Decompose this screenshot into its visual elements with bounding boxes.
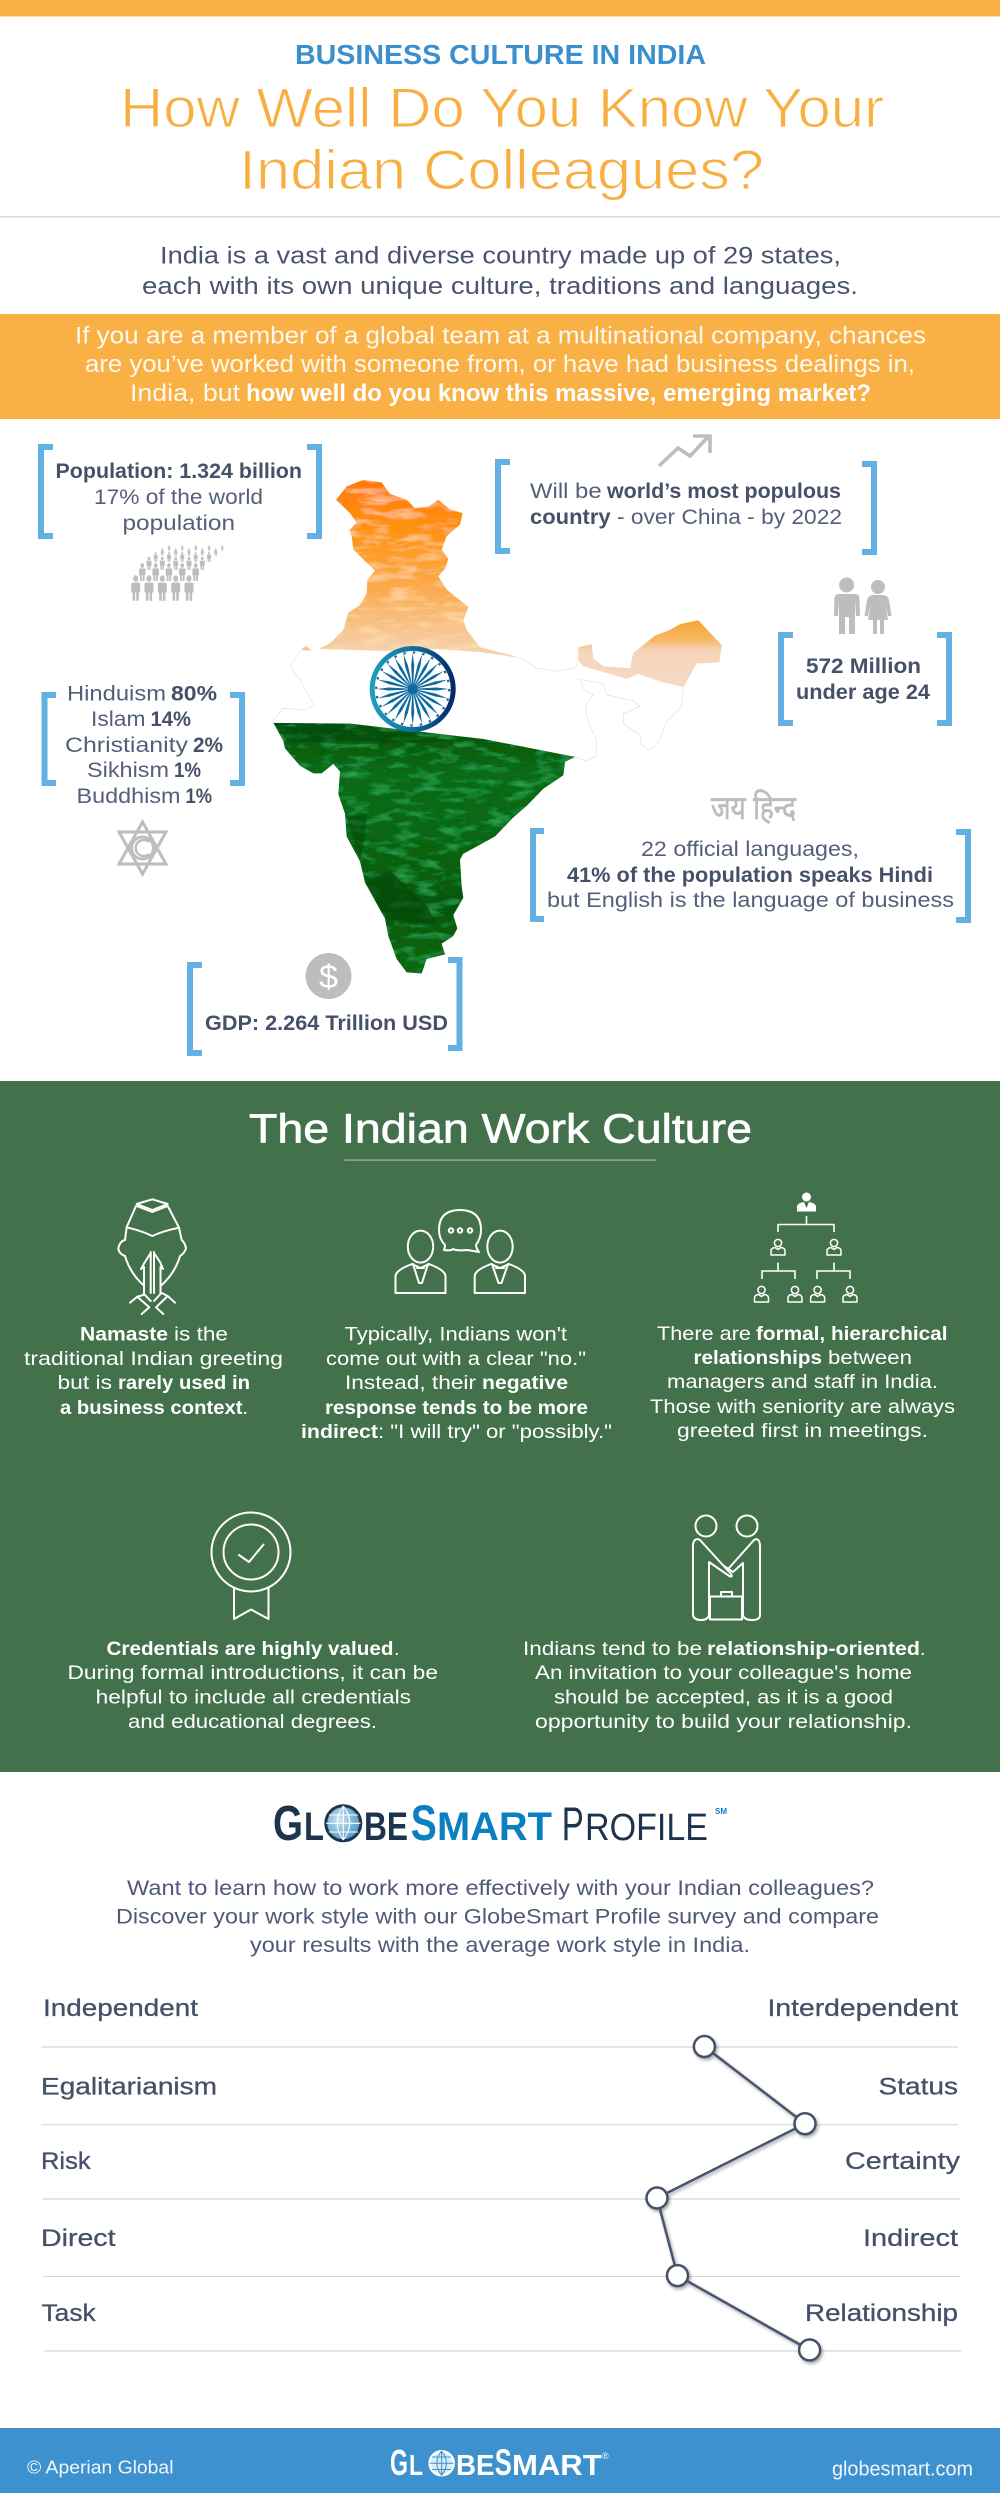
panel: most populous: country bbox=[530, 506, 611, 529]
panel: religions: Buddhism bbox=[76, 785, 180, 808]
icon: hierarchy bbox=[754, 1192, 857, 1302]
map: saffron region bbox=[318, 480, 522, 659]
panel: population: population bbox=[122, 512, 235, 535]
logo: globesmart profile: P bbox=[562, 1797, 584, 1850]
map of India in flag colours bbox=[272, 480, 722, 974]
intro text: each with its own unique culture, traditions and languages. bbox=[142, 273, 858, 300]
scale labels bbox=[41, 1995, 960, 2327]
text: indirect response bbox=[301, 1324, 612, 1443]
footer: globesmart.com bbox=[832, 2459, 973, 2481]
text: relationship oriented: relationship-oriented bbox=[707, 1638, 920, 1660]
scale labels: Interdependent bbox=[768, 1995, 958, 2022]
title bbox=[120, 76, 884, 201]
logo: globesmart profile: MART bbox=[437, 1805, 552, 1849]
panel: languages: but English is the language of business bbox=[547, 889, 954, 912]
text: hierarchy: Those with seniority are always bbox=[650, 1396, 955, 1418]
panel: religions: 80% bbox=[171, 682, 217, 706]
text: profile invitation: Want to learn how to work more effectively with your Indian colleagues? bbox=[127, 1876, 874, 1900]
profile line with nodes bbox=[646, 2036, 820, 2360]
panel: languages bbox=[533, 789, 968, 920]
logo: globesmart profile: BE bbox=[364, 1805, 408, 1849]
footer: © Aperian Global bbox=[27, 2457, 174, 2477]
logo: globesmart profile: G bbox=[273, 1797, 303, 1851]
text: namaste: traditional Indian greeting bbox=[24, 1348, 283, 1370]
scale labels: Status bbox=[878, 2074, 958, 2101]
intro text: India is a vast and diverse country made up of 29 states, bbox=[160, 242, 841, 270]
footer bbox=[0, 2428, 1000, 2493]
icon: handshake bbox=[693, 1516, 760, 1620]
panel: population: Population: 1.324 billion bbox=[56, 460, 302, 483]
icon: religious star and crescent bbox=[119, 822, 166, 874]
orange callout band: are you’ve worked with someone from, or have had business dealings in, bbox=[85, 351, 915, 378]
text: profile invitation: Discover your work style with our GlobeSmart Profile survey and compare bbox=[116, 1905, 879, 1929]
text: relationship oriented: . bbox=[920, 1638, 925, 1660]
text: relationship oriented bbox=[523, 1638, 925, 1733]
panel: religions: Islam bbox=[91, 708, 146, 731]
orange callout band: how well do you know this massive, emerging market? bbox=[246, 380, 871, 407]
text: relationship oriented: opportunity to build your relationship. bbox=[535, 1711, 912, 1733]
logo: globesmart: MART bbox=[512, 2450, 602, 2482]
scale labels: Risk bbox=[41, 2148, 92, 2175]
title: How Well Do You Know Your bbox=[120, 76, 884, 139]
orange callout band: If you are a member of a global team at a multinational company, chances bbox=[75, 322, 926, 350]
icon: dollar coin bbox=[306, 953, 352, 999]
text: namaste: . bbox=[242, 1397, 248, 1419]
scale labels: Indirect bbox=[863, 2225, 958, 2252]
panel: religions: Sikhism bbox=[87, 759, 169, 782]
chart: work style scales bbox=[41, 1995, 961, 2360]
heading: business culture in india: BUSINESS CULTURE IN INDIA bbox=[295, 39, 706, 70]
icon: dollar coin: $ bbox=[319, 958, 338, 995]
text: indirect response: negative bbox=[482, 1372, 568, 1394]
scale labels: Egalitarianism bbox=[41, 2074, 217, 2101]
scale labels: Independent bbox=[43, 1995, 198, 2022]
map: white band outline bbox=[272, 649, 683, 761]
text: namaste bbox=[24, 1324, 283, 1419]
intro text bbox=[142, 242, 858, 300]
scale labels: Task bbox=[42, 2300, 97, 2327]
panel: GDP bbox=[190, 953, 460, 1053]
panel: religions: 1% bbox=[186, 785, 212, 808]
text: hierarchy: There are bbox=[657, 1323, 751, 1345]
panel: 572 million under 24 bbox=[781, 578, 949, 723]
text: hierarchy: relationships bbox=[694, 1347, 822, 1369]
scale labels: Direct bbox=[41, 2225, 116, 2252]
logo: globesmart profile: ROFILE bbox=[585, 1807, 708, 1849]
text: credentials bbox=[68, 1638, 438, 1733]
text: credentials: During formal introductions, it can be bbox=[68, 1662, 438, 1684]
panel: languages: 41% of the population speaks Hindi bbox=[567, 864, 933, 887]
text: indirect response: : "I will try" or "possibly." bbox=[378, 1421, 612, 1443]
panel: religions: 14% bbox=[150, 708, 191, 731]
scale labels: Certainty bbox=[845, 2148, 960, 2175]
orange callout band bbox=[0, 314, 1000, 419]
panel: religions: Christianity bbox=[65, 734, 189, 757]
text: hierarchy: managers and staff in India. bbox=[667, 1371, 938, 1393]
text: hierarchy: formal, hierarchical bbox=[756, 1323, 948, 1345]
panel: 572 million under 24: under age 24 bbox=[796, 681, 930, 704]
panel: GDP: GDP: 2.264 Trillion USD bbox=[205, 1012, 448, 1035]
logo: globesmart profile: SM bbox=[715, 1807, 727, 1816]
text: credentials: . bbox=[394, 1638, 399, 1660]
text: hierarchy: between bbox=[828, 1347, 912, 1369]
text: relationship oriented: should be accepted, as it is a good bbox=[554, 1687, 893, 1709]
icon: credential badge bbox=[212, 1512, 290, 1619]
icon: rising arrow bbox=[659, 436, 710, 466]
text: namaste: Namaste bbox=[80, 1324, 168, 1346]
icon: namaste bbox=[118, 1199, 186, 1314]
logo: globesmart profile bbox=[273, 1795, 727, 1851]
panel: religions: Hinduism bbox=[67, 682, 166, 706]
map: saffron north-east bbox=[578, 620, 722, 687]
text: relationship oriented: Indians tend to be bbox=[523, 1638, 702, 1660]
icon: jai hind script: जय हिन्द bbox=[711, 789, 796, 826]
map: green region bbox=[273, 723, 575, 974]
panel: work culture bbox=[0, 1081, 1000, 1772]
panel: population bbox=[41, 447, 319, 601]
icon: conversation bbox=[396, 1210, 525, 1293]
panel: most populous: Will be bbox=[530, 480, 602, 503]
ashoka chakra bbox=[372, 648, 453, 730]
panel: religions: 1% bbox=[174, 759, 201, 782]
text: indirect response: come out with a clear "no." bbox=[326, 1348, 586, 1370]
text: indirect response: indirect bbox=[301, 1421, 379, 1443]
text: namaste: but is bbox=[58, 1372, 112, 1394]
text: namaste: a business context bbox=[60, 1397, 243, 1419]
text: profile invitation bbox=[116, 1876, 879, 1957]
text: namaste: rarely used in bbox=[118, 1372, 250, 1394]
logo: globesmart bbox=[390, 2442, 609, 2483]
icon: crowd of people bbox=[131, 545, 224, 601]
logo: globesmart: L bbox=[409, 2450, 423, 2482]
icon: two children bbox=[834, 578, 892, 634]
text: indirect response: Typically, Indians won't bbox=[344, 1324, 568, 1346]
text: hierarchy: greeted first in meetings. bbox=[677, 1420, 928, 1442]
title: Indian Colleagues? bbox=[239, 138, 764, 201]
panel: most populous: world’s most populous bbox=[606, 480, 841, 503]
top orange band bbox=[0, 0, 1000, 16]
text: credentials: and educational degrees. bbox=[128, 1711, 377, 1733]
panel: most populous: - over China - by 2022 bbox=[617, 506, 842, 529]
heading: the indian work culture: The Indian Work Culture bbox=[249, 1106, 752, 1152]
logo: globesmart: G bbox=[390, 2442, 408, 2483]
logo: globesmart: S bbox=[495, 2442, 512, 2483]
panel: population: 17% of the world bbox=[94, 486, 263, 509]
panel: most populous bbox=[498, 436, 874, 552]
panel: religions bbox=[44, 682, 242, 874]
panel: religions: 2% bbox=[193, 734, 223, 757]
text: namaste: is the bbox=[174, 1324, 228, 1346]
logo: globesmart profile: L bbox=[304, 1805, 324, 1849]
text: hierarchy bbox=[650, 1323, 955, 1442]
icon: globe bbox=[326, 1806, 361, 1841]
panel: languages: 22 official languages, bbox=[641, 838, 859, 861]
text: credentials: helpful to include all credentials bbox=[96, 1687, 411, 1709]
panel: 572 million under 24: 572 Million bbox=[806, 655, 921, 678]
text: profile invitation: your results with the average work style in India. bbox=[250, 1933, 750, 1957]
text: indirect response: Instead, their bbox=[345, 1372, 477, 1394]
text: relationship oriented: An invitation to your colleague's home bbox=[535, 1662, 912, 1684]
text: indirect response: response tends to be more bbox=[325, 1397, 588, 1419]
logo: globesmart: BE bbox=[456, 2450, 494, 2482]
text: credentials: Credentials are highly valued bbox=[106, 1638, 394, 1660]
logo: globesmart: ® bbox=[602, 2451, 609, 2461]
scale labels: Relationship bbox=[805, 2300, 958, 2327]
logo: globesmart profile: S bbox=[411, 1795, 437, 1851]
orange callout band: India, but bbox=[130, 380, 240, 407]
